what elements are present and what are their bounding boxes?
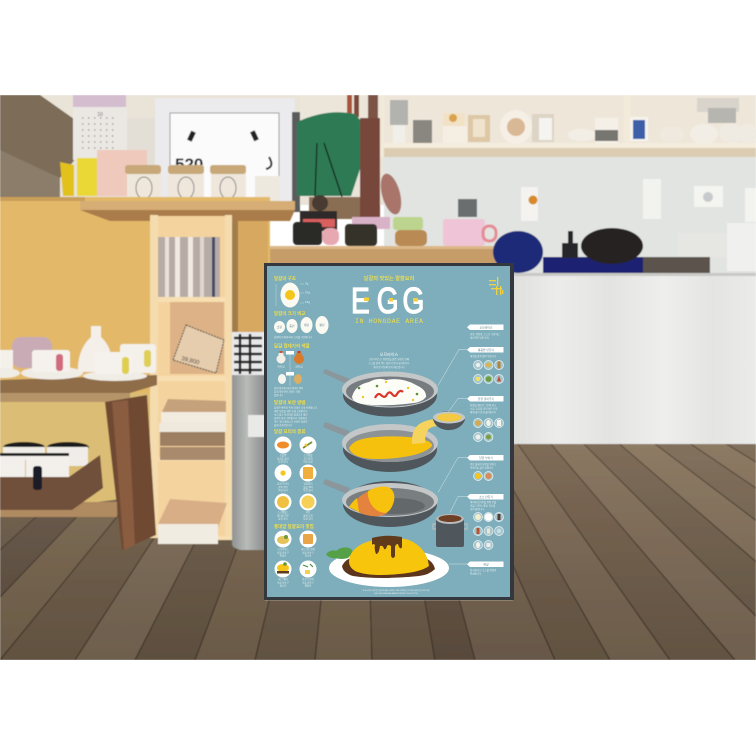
left section: Hongdae egg restaurants: 에그 샌드위치 xyxy=(301,547,315,551)
right callout: step 3 cooking the egg: 볶음밥을 올려 감쌉니다 xyxy=(470,466,494,470)
footer credits xyxy=(362,588,430,595)
left section: Hongdae egg restaurants: 달걀 브런치 xyxy=(302,577,314,581)
pan 2: egg batter being poured xyxy=(323,411,465,472)
left section: Hongdae egg restaurants: 상수동 xyxy=(280,584,287,588)
left section: storage text xyxy=(274,399,318,427)
right callout: step 3 cooking the egg xyxy=(438,455,504,492)
right callout: finished dish: 완성합니다 xyxy=(470,572,482,576)
box stack and wall items top left xyxy=(0,95,300,212)
right callout: step 4 sauce with ingredients: 버터에 밀가루를 볶아 루를 xyxy=(470,500,497,504)
omelet rice on a plate xyxy=(326,536,449,587)
poster frame xyxy=(264,263,514,600)
left section: egg dishes grid: 달걀 요리의 종류 xyxy=(274,428,305,435)
right callout: step 2 egg mixture: 달걀 풀어주기 xyxy=(478,397,495,401)
left section: hens and egg colour: 닭의 품종에 따라 껍데기 색이 xyxy=(274,386,303,390)
left section: hens and egg colour: 달걀 껍데기의 색깔 xyxy=(274,342,310,350)
pan 1: fried rice xyxy=(323,369,438,416)
right callout: rice base: 오므라이스 xyxy=(480,325,493,329)
right callout: finished dish: 완성 xyxy=(483,562,489,566)
left section: egg dishes grid: 부친 요리 xyxy=(303,488,313,492)
intro text: 소스를 얹어 먹는 일본식 양식 요리입니다 xyxy=(369,361,410,365)
intro text: 홍대 앞 식당의 인기 메뉴입니다 xyxy=(373,365,405,369)
left section: hens and egg colour: 없습니다 xyxy=(274,393,284,397)
left section: egg dishes grid: 지단 xyxy=(306,510,311,514)
left section: egg dishes grid: 익힌 요리 xyxy=(278,488,288,492)
bookshelf with books: 39,800 xyxy=(181,356,200,367)
intro text: 오므라이스 xyxy=(380,351,399,357)
wooden floor xyxy=(0,443,756,660)
left section: egg sizes: 달걀의 무게에 따라 크기를 구분합니다 xyxy=(274,335,313,339)
left section: hens and egg colour: 달라지며 영양 차이는 거의 xyxy=(274,390,300,394)
intro text xyxy=(369,351,410,369)
left section: egg dishes grid: 얇게 부친 xyxy=(303,514,313,518)
wall and shelves on the right xyxy=(40,95,756,277)
right callout: step 1 fried rice with ingredients xyxy=(438,347,504,386)
left section: egg sizes: 왕란 xyxy=(319,323,325,327)
right callout: step 2 egg mixture: 소금, 우유를 넣어 섞은 다음 xyxy=(470,406,498,410)
left section: Hongdae egg restaurants: 홍대앞 달걀요리 맛집 xyxy=(274,523,314,530)
footer credits: EGG IN HONGDAE AREA POSTER COLLECTION xyxy=(374,592,418,595)
left section: Hongdae egg restaurants xyxy=(274,523,316,588)
left section: storage text: 씻지 않고 보관하며 껍데기가 깨진 xyxy=(274,412,307,416)
left section: egg sizes: 소란 xyxy=(277,325,282,329)
left section: Hongdae egg restaurants: 서울 마포구 xyxy=(302,550,315,554)
left section: Hongdae egg restaurants: 서울 마포구 xyxy=(302,580,315,584)
white draped table and counter with cups xyxy=(270,112,756,444)
footer credits: 이 포스터는 홍대 앞 달걀 요리를 소개하는 인포그래픽입니다 자료 출처 및 디자인 정보 xyxy=(362,588,430,592)
poster xyxy=(264,263,514,600)
left section: Hongdae egg restaurants: 서교동 xyxy=(305,554,312,558)
left section: Hongdae egg restaurants: 서울 마포구 xyxy=(277,550,290,554)
right callout: step 3 cooking the egg: 달걀 부치기 xyxy=(479,456,493,460)
left section: egg anatomy: 13g xyxy=(305,300,310,304)
left section: storage text: 먹는 것이 좋습니다 신선한 달걀은 xyxy=(274,420,308,424)
left section: hens and egg colour xyxy=(274,342,310,397)
bookshelf with books xyxy=(150,215,232,544)
left section: hens and egg colour: 갈색 닭 xyxy=(295,364,303,368)
wooden table with mugs xyxy=(0,326,157,550)
right callout: finished dish: 접시에 담고 소스를 끼얹어 xyxy=(470,568,496,572)
right callout: step 4 sauce with ingredients: 만들고 양파, 케첩, 육수를 xyxy=(470,504,496,508)
right callout: step 2 egg mixture xyxy=(448,396,504,442)
left section: storage text: 물에 가라앉습니다 xyxy=(274,423,293,427)
left section: egg sizes xyxy=(274,310,328,339)
left section: egg dishes grid: 부친 요리 xyxy=(278,460,288,464)
title: EGG: EGG xyxy=(351,281,424,321)
product photo scene with poster xyxy=(0,95,756,660)
left section: egg sizes: 달걀의 크기 비교 xyxy=(274,310,305,317)
left section: egg dishes grid: 한쪽 면만 xyxy=(278,485,289,489)
box stack and wall items top left: 10 xyxy=(97,112,103,118)
poster subtitle: 달걀의 맛있는 알쓸요리 xyxy=(364,274,415,282)
left section: Hongdae egg restaurants: 합정동 xyxy=(305,584,312,588)
left section: egg dishes grid xyxy=(274,428,316,520)
poster background xyxy=(267,266,510,597)
left section: egg dishes grid: 달걀을 풀어 xyxy=(277,456,289,460)
left section: storage text: 달걀의 보관 방법 xyxy=(274,399,305,406)
left section: egg anatomy: 달걀의 구조 xyxy=(274,275,296,282)
left section: Hongdae egg restaurants: 에그 베네 xyxy=(278,577,288,581)
left section: egg dishes grid: 돌돌 말아 xyxy=(303,485,314,489)
left section: egg dishes grid: 부드럽게 xyxy=(304,456,312,460)
right callout: step 3 cooking the egg: 약한 불에서 달걀을 익히고 xyxy=(470,462,497,466)
right callout: step 1 fried rice with ingredients: 재료를 잘게 썰어 볶습니다 xyxy=(470,354,497,358)
left section: egg dishes grid: 익힌 달걀 xyxy=(303,460,314,464)
box stack and wall items top left: 520 xyxy=(175,155,203,174)
left section: egg dishes grid: 버터에 볶은 xyxy=(277,514,290,518)
right callout: step 1 fried rice with ingredients: 볶음밥 만들기 xyxy=(478,348,495,352)
left section: Hongdae egg restaurants: 오므라이스 xyxy=(278,547,289,551)
pan 3: omelet folded over rice xyxy=(323,479,438,527)
right callout: step 4 sauce with ingredients: 소스 만들기 xyxy=(479,495,493,499)
left section: egg dishes grid: 오믈렛 xyxy=(280,453,287,457)
pot of demi-glace sauce xyxy=(433,514,467,547)
right callout: rice base xyxy=(467,324,504,340)
intro text: 오므라이스는 볶음밥을 얇은 달걀로 감싸 xyxy=(369,357,410,361)
metal tube with paper roll xyxy=(232,332,265,550)
right callout: step 4 sauce with ingredients xyxy=(450,494,504,550)
left section: storage text: 냉장 보관을 하면 오래 신선합니다 xyxy=(274,409,308,413)
left section: egg anatomy: 37g xyxy=(305,290,310,294)
left section: storage text: 달걀은 바로 사용합니다 가열해서 xyxy=(274,416,307,420)
left section: egg dishes grid: 달걀 요리 xyxy=(278,516,288,520)
left section: egg dishes grid: 스크램블 xyxy=(304,453,313,457)
right callout: step 4 sauce with ingredients: 넣어 끓입니다 xyxy=(470,507,485,511)
right callout: step 2 egg mixture: 체에 걸러 곱게 풀어줍니다 xyxy=(470,410,497,414)
yellow wood wall xyxy=(0,197,295,522)
left section: egg anatomy xyxy=(274,275,310,308)
left section: egg sizes: 대란 xyxy=(304,323,309,327)
left section: Hongdae egg restaurants: 서울 마포구 xyxy=(277,580,290,584)
left section: egg dishes grid: 스크램블드 xyxy=(278,510,289,514)
photo background: shop interior xyxy=(0,95,756,660)
left section: storage text: 달걀은 뾰족한 쪽이 아래로 가게 보관합니다 xyxy=(274,406,318,410)
left section: egg sizes: 중란 xyxy=(289,324,295,328)
right callout: finished dish xyxy=(449,562,504,576)
left section: egg anatomy: 7g xyxy=(305,282,309,286)
right callout: step 2 egg mixture: 달걀을 깨뜨려 그릇에 담고 xyxy=(470,403,497,407)
left section: egg dishes grid: 달걀 프라이 xyxy=(277,482,289,486)
subtitle: in Hongdae area: IN HONGDAE AREA xyxy=(355,318,423,325)
left section: egg dishes grid: 달걀말이 xyxy=(304,482,312,486)
left section: Hongdae egg restaurants: 연남동 xyxy=(280,554,287,558)
right callout: rice base: 달걀, 볶음밥, 소스로 구성되는 xyxy=(470,332,501,336)
right callout: rice base: 대표적인 달걀 요리 xyxy=(470,336,489,340)
logo xyxy=(489,277,503,295)
left section: hens and egg colour: 백색 닭 xyxy=(277,364,285,368)
left section: egg dishes grid: 달걀 요리 xyxy=(303,516,313,520)
